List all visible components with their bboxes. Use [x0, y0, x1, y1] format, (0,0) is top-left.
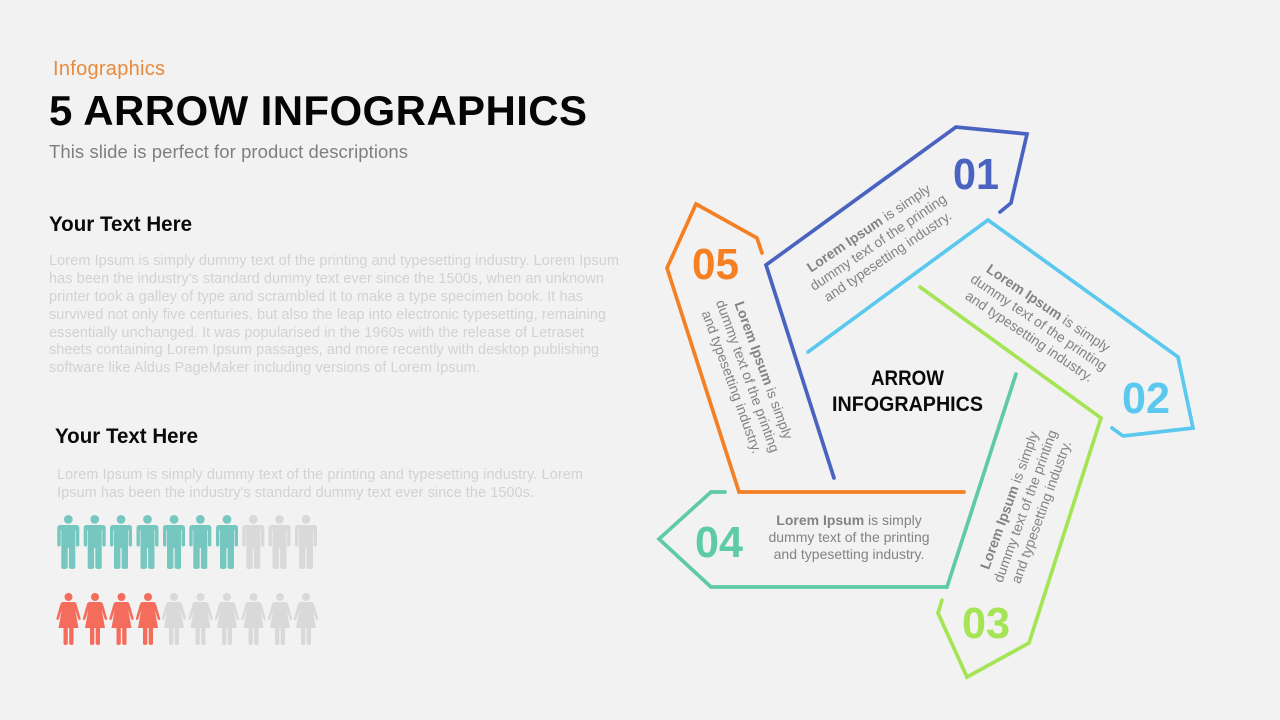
arrow 02 description: Lorem Ipsum is simply [984, 261, 1113, 355]
center label: ARROW [871, 367, 944, 390]
paragraph: first text block: software like Aldus PageMaker including versions of Lorem Ipsum. [49, 360, 480, 376]
subtitle: This slide is perfect for product descriptions [49, 141, 408, 162]
arrow 01 description [797, 176, 959, 308]
arrow 02 description: dummy text of the printing [968, 270, 1110, 374]
arrow 01 description: Lorem Ipsum is simply [804, 181, 933, 275]
number 04: 04 [695, 518, 744, 567]
arrow 04 description: Lorem Ipsum is simply [776, 512, 922, 528]
paragraph: first text block: survived not only five centuries, but also the leap into electronic typesetting, remaining [49, 307, 606, 323]
arrow 05 description: dummy text of the printing [713, 298, 783, 454]
arrow 04 description [768, 512, 930, 562]
paragraph: first text block: sheets containing Lorem Ipsum passages, and more recently with desktop publishing [49, 342, 599, 358]
arrow 05 description: Lorem Ipsum is simply [732, 299, 796, 441]
number 03: 03 [962, 599, 1010, 648]
pictogram: female figures, 4 of 10 highlighted [56, 593, 318, 645]
paragraph: first text block: printer took a galley of type and scrambled it to make a type specimen book. It has [49, 289, 583, 305]
arrow 01 description: dummy text of the printing [807, 190, 949, 294]
arrow 05 description: and typesetting industry. [699, 308, 765, 455]
paragraph: first text block: has been the industry's standard dummy text ever since the 1500s, when an unknown [49, 271, 604, 287]
title: 5 ARROW INFOGRAPHICS [49, 87, 587, 134]
arrow 02: cyan [808, 220, 1193, 436]
paragraph: second text block [57, 467, 583, 501]
arrow 03 description: dummy text of the printing [990, 428, 1060, 584]
number 05: 05 [692, 240, 739, 289]
paragraph: second text block: Ipsum has been the industry's standard dummy text ever since the 1500s. [57, 485, 534, 501]
arrow 04 description: dummy text of the printing [768, 529, 930, 545]
heading: second text block: Your Text Here [55, 425, 198, 448]
arrow 03 description: and typesetting industry. [1008, 438, 1074, 585]
paragraph: first text block: essentially unchanged. It was popularised in the 1960s with the release of Letraset [49, 325, 584, 341]
pictogram: male figures, 7 of 10 highlighted [57, 515, 317, 569]
arrow 04: teal [659, 374, 1016, 587]
arrow 05: orange [667, 204, 964, 492]
arrow 01 description: and typesetting industry. [821, 207, 954, 305]
number 02: 02 [1122, 374, 1170, 423]
arrow 02 description [958, 256, 1120, 388]
arrow 04 description: and typesetting industry. [774, 546, 924, 562]
paragraph: first text block [49, 253, 619, 376]
arrow 03 description: Lorem Ipsum is simply [977, 429, 1041, 571]
arrow 03 description [974, 422, 1076, 590]
center label [832, 367, 983, 416]
number 01: 01 [953, 150, 999, 199]
heading: first text block: Your Text Here [49, 213, 192, 236]
center label: INFOGRAPHICS [832, 393, 983, 416]
arrow 03: green [920, 287, 1101, 677]
paragraph: second text block: Lorem Ipsum is simply dummy text of the printing and typesetting industry. Lorem [57, 467, 583, 483]
arrow 02 description: and typesetting industry. [963, 287, 1096, 385]
paragraph: first text block: Lorem Ipsum is simply dummy text of the printing and typesetting industry. Lorem Ipsum [49, 253, 619, 269]
arrow 01: blue [766, 127, 1027, 478]
arrow 05 description [697, 292, 799, 460]
eyebrow label: Infographics [53, 58, 165, 80]
